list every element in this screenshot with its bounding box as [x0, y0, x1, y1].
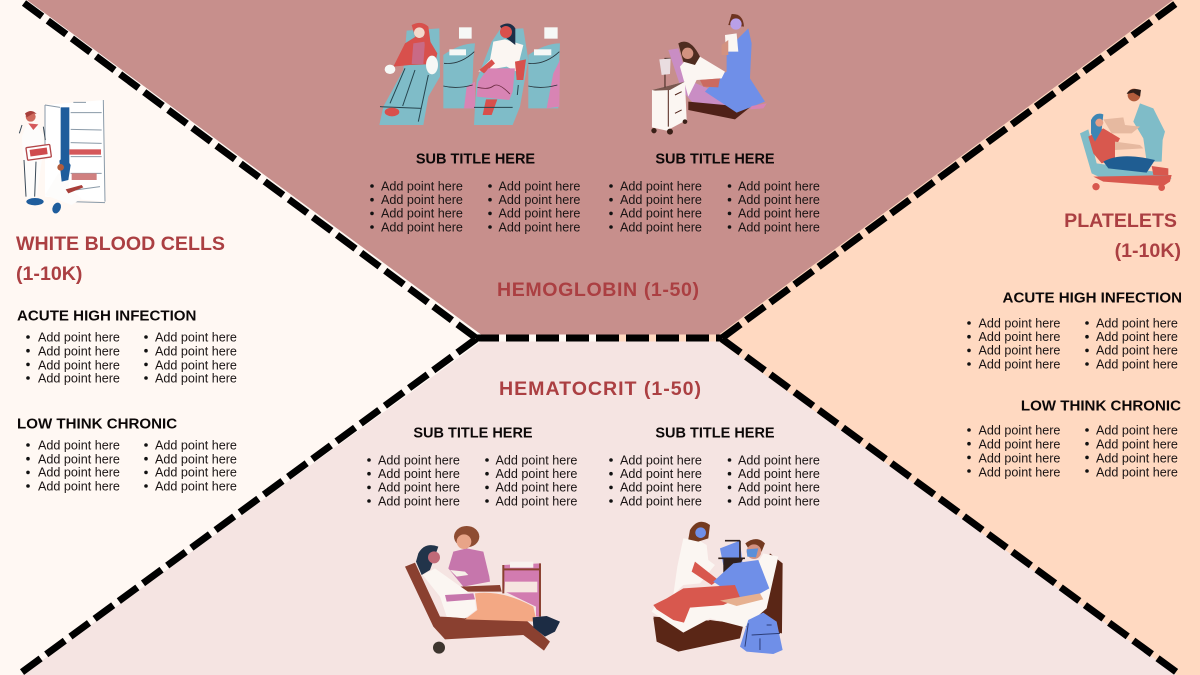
list: hemoglobin column 4: Add point here — [738, 206, 820, 220]
list: chronic column 1: Add point here — [978, 424, 1060, 438]
heading: white blood cells: WHITE BLOOD CELLS — [16, 233, 225, 255]
list: acute column 2: Add point here — [155, 344, 237, 358]
panel: hematocrit background — [22, 342, 1177, 675]
icon: two donors in teal chairs — [379, 23, 560, 125]
subheading: low think chronic: LOW THINK CHRONIC — [17, 416, 177, 432]
list: hemoglobin column 4: Add point here — [738, 193, 820, 207]
icon: patient on bed with nurse — [651, 14, 767, 135]
list: chronic column 1: Add point here — [38, 480, 120, 494]
list: hematocrit column 2: Add point here — [496, 454, 577, 468]
list: chronic column 1 — [967, 424, 1060, 480]
list: hematocrit column 1: Add point here — [378, 467, 460, 481]
list: hematocrit column 1: Add point here — [378, 454, 460, 468]
list: acute column 1: Add point here — [38, 358, 120, 372]
list: hematocrit column 2 — [485, 454, 577, 508]
list: acute column 2: Add point here — [155, 330, 237, 344]
list: acute column 2: Add point here — [1096, 358, 1178, 372]
list: hematocrit column 3: Add point here — [620, 480, 702, 494]
heading: platelets: (1-10K) — [1115, 240, 1181, 262]
list: hematocrit column 4: Add point here — [738, 454, 820, 468]
list: chronic column 2: Add point here — [1096, 466, 1178, 480]
list: hematocrit column 3 — [609, 454, 702, 508]
list: hemoglobin column 3: Add point here — [620, 206, 702, 220]
subheading: low think chronic: LOW THINK CHRONIC — [1021, 398, 1181, 414]
subheading: hematocrit left: SUB TITLE HERE — [413, 426, 533, 442]
list: chronic column 2 — [1085, 424, 1178, 480]
heading: hemoglobin: HEMOGLOBIN (1-50) — [497, 279, 699, 301]
list: acute column 2: Add point here — [1096, 316, 1178, 330]
list: hemoglobin column 2: Add point here — [498, 206, 580, 220]
list: chronic column 1: Add point here — [38, 438, 120, 452]
list: hemoglobin column 4: Add point here — [738, 180, 820, 194]
list: hemoglobin column 3: Add point here — [620, 220, 702, 234]
list: hemoglobin column 1: Add point here — [381, 180, 463, 194]
list: chronic column 2: Add point here — [155, 480, 237, 494]
list: hematocrit column 4: Add point here — [738, 494, 820, 508]
panel: platelets background — [600, 0, 1200, 675]
list: chronic column 2: Add point here — [155, 452, 237, 466]
list: acute column 2: Add point here — [1096, 330, 1178, 344]
icon: nurse with masked patient and backpack — [652, 522, 783, 654]
list: chronic column 2 — [144, 438, 237, 494]
list: hemoglobin column 1: Add point here — [381, 206, 463, 220]
icon: patient in brown recliner with carer — [405, 526, 560, 654]
list: hematocrit column 1: Add point here — [378, 494, 460, 508]
list: acute column 2: Add point here — [155, 372, 237, 386]
list: chronic column 1: Add point here — [978, 466, 1060, 480]
list: acute column 2 — [1085, 316, 1178, 372]
list: acute column 1 — [26, 330, 120, 386]
panel text: hemoglobin — [370, 152, 820, 301]
list: hematocrit column 3: Add point here — [620, 467, 702, 481]
list: hemoglobin column 3: Add point here — [620, 193, 702, 207]
list: hemoglobin column 1: Add point here — [381, 220, 463, 234]
list: acute column 2: Add point here — [1096, 344, 1178, 358]
list: acute column 1 — [967, 316, 1060, 372]
icon: blood storage fridge with two workers — [19, 100, 105, 215]
icon: patient and nurse with teal recliner — [1080, 89, 1172, 191]
list: hemoglobin column 3: Add point here — [620, 180, 702, 194]
subheading: acute high infection: ACUTE HIGH INFECTION — [1003, 290, 1182, 306]
panel text: white blood cells — [16, 233, 237, 494]
list: chronic column 1: Add point here — [978, 452, 1060, 466]
list: hemoglobin column 2: Add point here — [498, 220, 580, 234]
list: hematocrit column 3: Add point here — [620, 454, 702, 468]
list: hemoglobin column 4 — [728, 180, 820, 234]
list: hemoglobin column 2: Add point here — [498, 180, 580, 194]
list: acute column 2 — [144, 330, 237, 386]
list: acute column 1: Add point here — [38, 372, 120, 386]
list: hematocrit column 2: Add point here — [496, 480, 577, 494]
list: hematocrit column 1: Add point here — [378, 480, 460, 494]
list: acute column 1: Add point here — [978, 358, 1060, 372]
list: chronic column 1: Add point here — [38, 466, 120, 480]
panel text: platelets — [967, 210, 1182, 480]
subheading: acute high infection: ACUTE HIGH INFECTION — [17, 308, 196, 324]
list: hematocrit column 2: Add point here — [496, 494, 577, 508]
list: hematocrit column 1 — [367, 454, 460, 508]
list: chronic column 1 — [26, 438, 120, 494]
panel text: hematocrit — [367, 378, 820, 508]
list: hemoglobin column 4: Add point here — [738, 220, 820, 234]
list: hematocrit column 3: Add point here — [620, 494, 702, 508]
list: hematocrit column 2: Add point here — [496, 467, 577, 481]
list: hematocrit column 4: Add point here — [738, 467, 820, 481]
list: acute column 1: Add point here — [38, 344, 120, 358]
list: chronic column 2: Add point here — [155, 466, 237, 480]
heading: hematocrit: HEMATOCRIT (1-50) — [499, 378, 701, 400]
list: acute column 1: Add point here — [978, 344, 1060, 358]
heading: platelets: PLATELETS — [1064, 210, 1177, 232]
subheading: hematocrit right: SUB TITLE HERE — [655, 426, 775, 442]
list: hemoglobin column 1: Add point here — [381, 193, 463, 207]
subheading: hemoglobin left: SUB TITLE HERE — [416, 152, 535, 168]
list: chronic column 2: Add point here — [1096, 424, 1178, 438]
list: hematocrit column 4: Add point here — [738, 480, 820, 494]
panel: white blood cells background — [0, 0, 600, 675]
list: acute column 1: Add point here — [978, 316, 1060, 330]
list: hemoglobin column 2 — [488, 180, 580, 234]
list: chronic column 2: Add point here — [155, 438, 237, 452]
list: hemoglobin column 2: Add point here — [498, 193, 580, 207]
list: hemoglobin column 3 — [609, 180, 702, 234]
list: hematocrit column 4 — [728, 454, 820, 508]
list: chronic column 2: Add point here — [1096, 438, 1178, 452]
list: acute column 2: Add point here — [155, 358, 237, 372]
list: chronic column 1: Add point here — [978, 438, 1060, 452]
list: chronic column 2: Add point here — [1096, 452, 1178, 466]
subheading: hemoglobin right: SUB TITLE HERE — [655, 152, 775, 168]
list: acute column 1: Add point here — [38, 330, 120, 344]
list: chronic column 1: Add point here — [38, 452, 120, 466]
panel: hemoglobin background — [27, 0, 1173, 334]
list: hemoglobin column 1 — [370, 180, 463, 234]
list: acute column 1: Add point here — [978, 330, 1060, 344]
heading: white blood cells: (1-10K) — [16, 263, 82, 285]
